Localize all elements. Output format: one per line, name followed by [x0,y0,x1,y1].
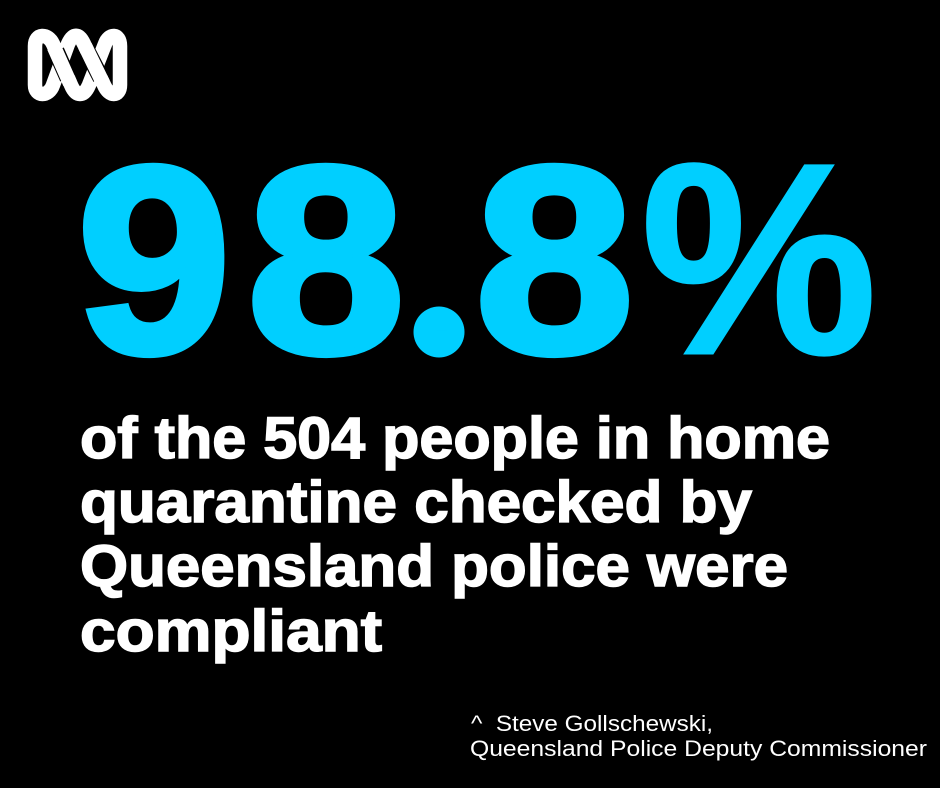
decimal point [414,270,464,359]
statement text: of the 504 people in home [80,406,830,471]
statement text: quarantine checked by [80,470,752,535]
attribution [470,711,927,761]
big statistic: 9 [77,112,231,409]
statement text [80,406,830,664]
attribution: Queensland Police Deputy Commissioner [470,736,927,761]
statement text: compliant [80,599,382,664]
big statistic: % [641,107,877,411]
icon: ABC logo [35,36,120,94]
decimal point: . [431,270,453,359]
big statistic: 8 [475,112,634,409]
big statistic [77,107,877,411]
attribution: ^ Steve Gollschewski, [471,711,713,736]
statement text: Queensland police were [80,534,788,599]
big statistic: 8 [247,112,405,409]
